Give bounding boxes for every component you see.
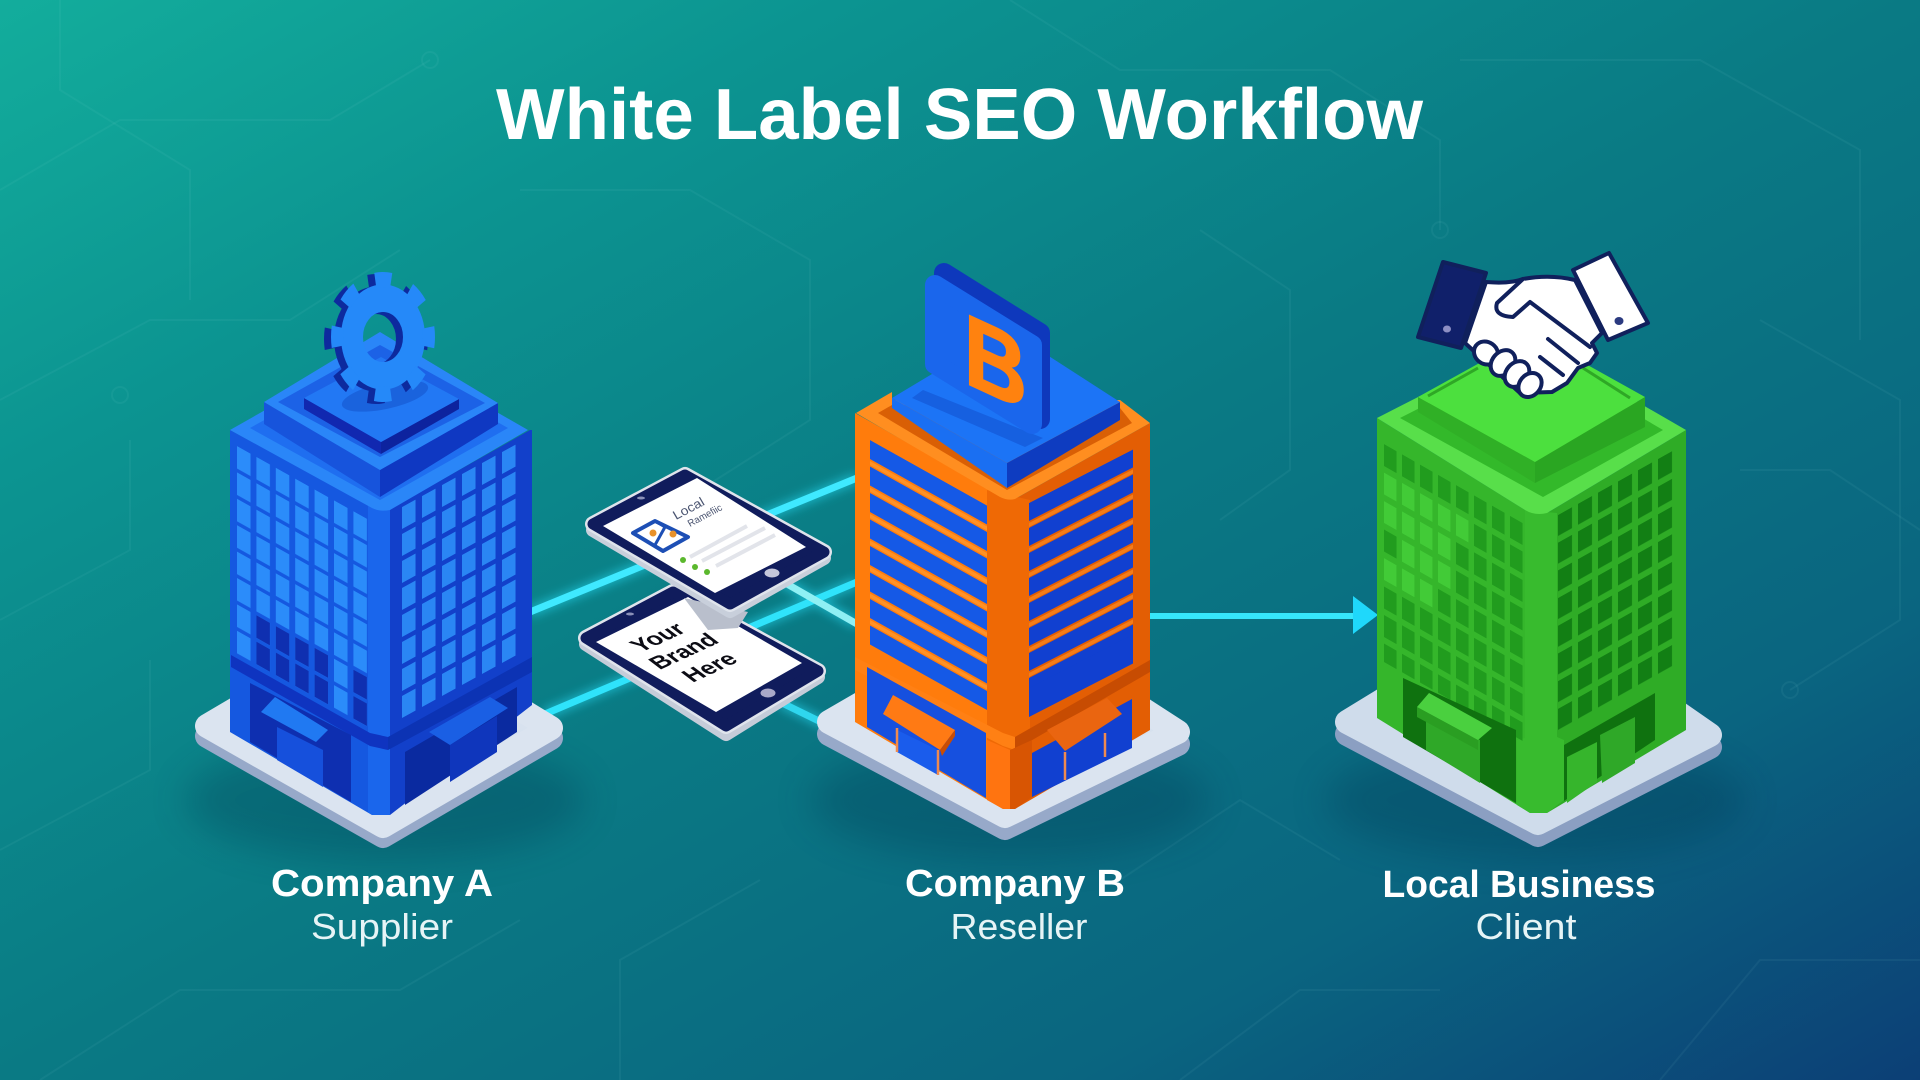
storefront right C [1564, 693, 1655, 803]
label: Company A: Company A [271, 863, 493, 905]
building: Local Business client [1347, 253, 1710, 835]
lower band B [855, 657, 1150, 750]
storefront right B [1032, 698, 1132, 797]
sublabel: Client: Client [1476, 906, 1576, 947]
storefront right A [405, 687, 517, 805]
sublabel: Supplier: Supplier [311, 906, 453, 947]
platform B [829, 620, 1178, 828]
tablet brand text: Ramefiic [686, 502, 725, 530]
label: Company B [905, 863, 1125, 947]
tablet: Local Ramefiic branded report [593, 475, 824, 630]
window stripes right B [1029, 449, 1133, 717]
connector lines between companies [530, 478, 857, 724]
tower B body [855, 392, 1150, 809]
building: Company A supplier [207, 280, 551, 836]
label: Company A [271, 863, 493, 947]
upper roof C [1418, 334, 1645, 483]
sublabel: Reseller: Reseller [950, 906, 1088, 947]
window stripes left B [870, 440, 987, 712]
tablet text: Your [624, 619, 691, 656]
tablet text [624, 619, 743, 686]
upper roof A [264, 332, 498, 497]
tablet brand text: Local [670, 495, 707, 522]
windows right A [402, 441, 522, 719]
lower band A [231, 655, 532, 750]
tablet logo [633, 521, 688, 551]
sign with letter B [935, 273, 1040, 432]
storefront left C [1403, 678, 1516, 803]
tablet: Your Brand Here [586, 592, 818, 734]
tablet text lines [690, 526, 775, 566]
lower front corner B [987, 740, 1032, 809]
tablet brand text [670, 495, 725, 530]
windows left A [237, 446, 369, 728]
windows right C [1558, 449, 1675, 733]
icon: handshake [1418, 253, 1648, 402]
windows left C [1384, 444, 1524, 742]
platform C [1347, 610, 1710, 835]
storefront left B [867, 667, 986, 798]
arrow: Company B to Local Business [1150, 596, 1378, 634]
tower A body [230, 345, 532, 815]
tablet text: Here [676, 648, 743, 686]
sign with letter B: B [964, 291, 1027, 432]
label: Local Business: Local Business [1382, 864, 1656, 906]
tower C body [1377, 340, 1686, 813]
tablet status dots [680, 557, 710, 575]
soft shadows beneath buildings [185, 740, 1745, 860]
label: Company B: Company B [905, 863, 1125, 905]
tablet text: Brand [643, 629, 724, 673]
label: Local Business [1382, 864, 1656, 947]
icon: gear [330, 280, 429, 396]
building: Company B reseller [829, 273, 1178, 828]
storefront left A [250, 683, 351, 802]
platform A [207, 624, 551, 836]
title: White Label SEO Workflow [496, 75, 1424, 155]
roof block B [892, 329, 1120, 488]
